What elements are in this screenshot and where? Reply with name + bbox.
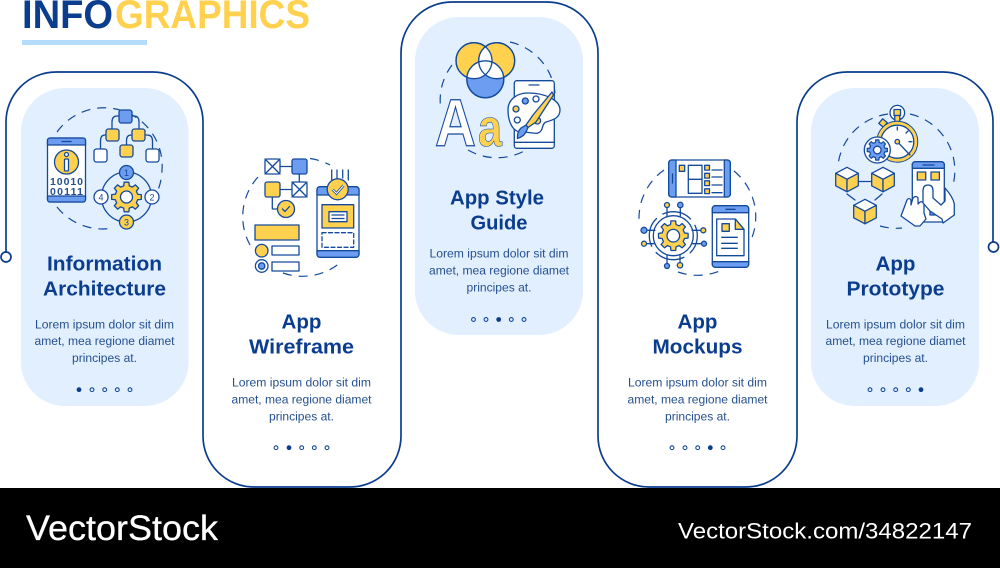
numbered cycle with gear: 3	[124, 218, 129, 228]
panel text: app wireframe: amet, mea regione diamet	[232, 392, 372, 406]
panel text: app wireframe	[232, 310, 372, 423]
panel text: app wireframe: Lorem ipsum dolor sit dim	[232, 376, 371, 390]
icon: app style guide	[435, 42, 560, 161]
panel text: app style guide: amet, mea regione diamet	[429, 264, 570, 278]
panel text: information architecture: Lorem ipsum dolor sit dim	[35, 317, 174, 331]
panel text: app mockups: principes at.	[665, 409, 730, 423]
flowchart tree	[94, 110, 159, 162]
panel text: app style guide: App Style	[450, 186, 544, 210]
panel text: app mockups	[628, 310, 768, 423]
panel text: information architecture	[34, 253, 175, 365]
panel text: app prototype: Prototype	[846, 278, 944, 301]
icon: app mockups	[639, 160, 756, 275]
panel text: app style guide: Guide	[470, 212, 528, 234]
panel text: app mockups: App	[678, 310, 718, 333]
panel text: app style guide: principes at.	[466, 280, 532, 294]
panel text: app wireframe: App	[282, 310, 322, 333]
landscape phone with list	[669, 160, 730, 197]
typography letters: A	[435, 86, 476, 161]
panel text: app prototype: principes at.	[863, 351, 928, 365]
phone with check badge	[317, 170, 359, 257]
panel text: app mockups: Mockups	[652, 335, 742, 358]
panel text: app mockups: Lorem ipsum dolor sit dim	[628, 376, 767, 390]
panel text: app mockups: amet, mea regione diamet	[628, 392, 768, 406]
panel text: app prototype: Lorem ipsum dolor sit dim	[826, 317, 965, 331]
phone with document	[712, 206, 749, 267]
typography letters: a	[478, 99, 502, 158]
panel text: app style guide: Lorem ipsum dolor sit dim	[430, 246, 568, 260]
form elements	[255, 225, 299, 272]
title	[22, 0, 310, 37]
pagination dots: step 1	[77, 387, 132, 392]
pagination dots: step 5	[868, 387, 923, 392]
phone with info symbol and binary: 00111	[50, 186, 83, 198]
panel text: app prototype	[826, 253, 966, 365]
wireframe flow boxes	[265, 159, 307, 218]
panel text: information architecture: Information	[47, 253, 162, 276]
footer watermark bar: VectorStock	[26, 509, 219, 548]
panel text: app wireframe: principes at.	[269, 409, 334, 423]
stopwatch with gear badge	[864, 105, 918, 163]
phone with info symbol and binary	[48, 138, 86, 202]
panel fill: app prototype	[811, 88, 979, 406]
gear with circuit nodes	[641, 202, 706, 268]
pagination dots: step 4	[670, 445, 725, 450]
panel fill: information architecture	[21, 88, 188, 406]
numbered cycle with gear: 4	[98, 192, 104, 202]
icon: app wireframe	[243, 158, 359, 276]
panel text: app style guide	[429, 186, 570, 294]
icon: app prototype	[836, 105, 955, 228]
panel text: app prototype: App	[876, 253, 916, 276]
pagination dots: step 3	[472, 317, 526, 322]
panel text: app prototype: amet, mea regione diamet	[826, 334, 966, 348]
connected cubes	[836, 167, 894, 224]
phone with hands	[901, 162, 954, 226]
icon: information architecture	[48, 108, 162, 229]
title underline	[22, 40, 147, 45]
footer watermark bar	[0, 488, 1000, 568]
panel text: information architecture: principes at.	[72, 351, 137, 365]
panel fill: app style guide	[415, 17, 583, 335]
venn diagram	[456, 43, 515, 98]
phone with palette and brush	[508, 81, 560, 148]
panel text: app wireframe: Wireframe	[249, 335, 354, 358]
numbered cycle with gear	[94, 166, 159, 229]
phone with info symbol and binary: 10010	[50, 176, 83, 188]
numbered cycle with gear: 2	[149, 192, 155, 202]
footer watermark bar: VectorStock.com/34822147	[678, 518, 972, 544]
panel text: information architecture: amet, mea regione diamet	[34, 334, 175, 348]
panel text: information architecture: Architecture	[43, 278, 166, 301]
numbered cycle with gear: 1	[124, 168, 129, 178]
pagination dots: step 2	[274, 445, 329, 450]
